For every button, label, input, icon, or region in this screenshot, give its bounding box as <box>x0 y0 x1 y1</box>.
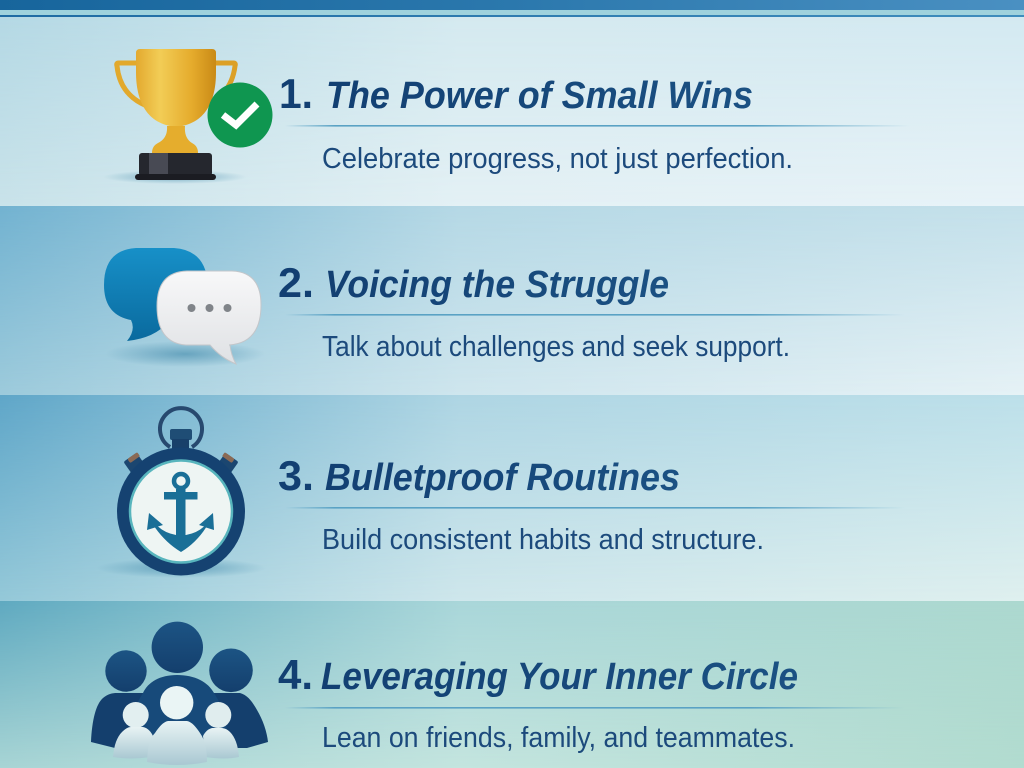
panel: voicing the struggle <box>0 206 1024 395</box>
heading 3: 3. <box>278 452 314 499</box>
icon: stopwatch with anchor <box>96 408 266 578</box>
description 3: Build consistent habits and structure. <box>322 524 764 556</box>
title 1: The Power of Small Wins <box>326 75 753 117</box>
panel: leveraging your inner circle <box>0 601 1024 768</box>
description 1: Celebrate progress, not just perfection. <box>322 143 793 175</box>
title 3: Bulletproof Routines <box>325 457 680 499</box>
icon: trophy with check mark <box>103 49 272 184</box>
title 4: Leveraging Your Inner Circle <box>321 656 798 698</box>
description 2: Talk about challenges and seek support. <box>322 331 790 363</box>
panel: the power of small wins <box>0 17 1024 206</box>
description 4: Lean on friends, family, and teammates. <box>322 722 795 754</box>
heading 4: 4. <box>278 651 313 698</box>
top header bar <box>0 0 1024 18</box>
heading 1: 1. <box>279 70 313 117</box>
title 2: Voicing the Struggle <box>325 264 669 306</box>
icon: green check badge <box>208 82 272 148</box>
panel: bulletproof routines <box>0 395 1024 601</box>
icon: speech bubbles <box>104 248 265 367</box>
heading 2: 2. <box>278 259 314 306</box>
icon: group of people <box>91 622 268 765</box>
